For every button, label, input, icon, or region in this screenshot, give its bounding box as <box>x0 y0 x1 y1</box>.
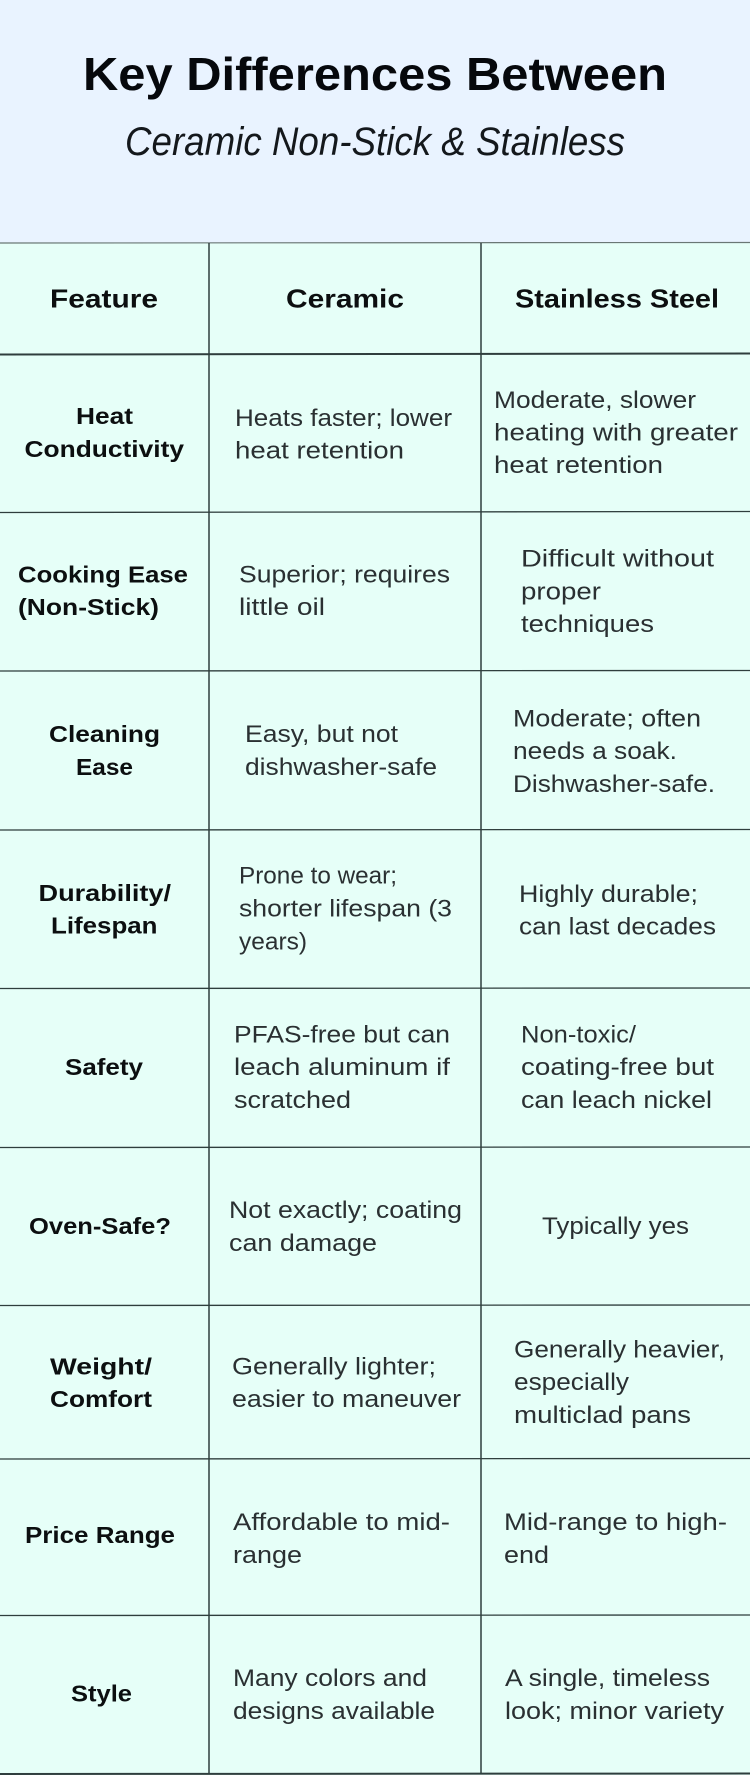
ceramic cell: Affordable to mid- <box>233 1509 450 1536</box>
ceramic cell <box>239 561 450 621</box>
ceramic cell: Many colors and <box>233 1665 427 1692</box>
stainless cell <box>494 387 738 479</box>
ceramic cell <box>233 1509 450 1569</box>
ceramic cell: Prone to wear; <box>239 863 397 890</box>
feature label: Cooking Ease <box>18 561 188 587</box>
stainless cell: needs a soak. <box>513 738 677 765</box>
row: Style <box>71 1665 725 1725</box>
row: Safety <box>65 1021 714 1114</box>
row: Oven-Safe <box>29 1197 689 1257</box>
table header row <box>50 284 719 314</box>
feature label: Comfort <box>50 1386 152 1412</box>
stainless cell: heat retention <box>494 452 663 479</box>
ceramic cell: Easy, but not <box>245 721 398 748</box>
feature label: Durability/ <box>38 880 172 906</box>
ceramic cell: leach aluminum if <box>234 1054 450 1081</box>
ceramic cell <box>235 405 452 464</box>
ceramic cell: Superior; requires <box>239 561 450 588</box>
ceramic cell: scratched <box>234 1087 351 1114</box>
feature label: Ease <box>76 754 133 780</box>
ceramic cell <box>232 1353 461 1413</box>
stainless cell <box>521 546 714 638</box>
ceramic cell: range <box>233 1542 302 1569</box>
feature label: Conductivity <box>24 436 184 462</box>
stainless cell: Highly durable; <box>519 881 698 908</box>
feature label <box>18 561 188 620</box>
row: Heat Conductivity <box>24 387 738 479</box>
stainless cell <box>514 1336 725 1429</box>
ceramic cell <box>234 1021 450 1114</box>
ceramic cell <box>233 1665 435 1725</box>
feature label <box>24 403 184 462</box>
stainless cell <box>513 705 715 798</box>
stainless cell: Typically yes <box>542 1213 689 1240</box>
feature label: Heat <box>76 403 133 429</box>
feature label <box>38 880 172 939</box>
stainless cell: can last decades <box>519 914 716 941</box>
stainless cell: heating with greater <box>494 420 738 446</box>
stainless cell <box>505 1665 725 1725</box>
feature label <box>50 1353 153 1412</box>
feature label: Style <box>71 1680 132 1706</box>
stainless cell: Generally heavier, <box>514 1336 725 1363</box>
feature label: Cleaning <box>49 721 160 747</box>
feature label: Weight/ <box>50 1353 153 1379</box>
stainless cell: Difficult without <box>521 546 714 572</box>
row: Weight/Comfort <box>50 1336 725 1429</box>
stainless cell: Moderate; often <box>513 705 701 732</box>
ceramic cell <box>239 863 452 956</box>
feature label: Lifespan <box>51 913 158 939</box>
stainless cell: look; minor variety <box>505 1698 725 1725</box>
header panel <box>0 0 750 243</box>
stainless cell: especially <box>514 1369 630 1396</box>
row: Cleaning Ease <box>49 705 715 798</box>
stainless cell: Moderate, slower <box>494 387 696 414</box>
ceramic cell: Generally lighter; <box>232 1353 436 1380</box>
ceramic cell <box>229 1197 462 1257</box>
header: Stainless Steel: Stainless Steel <box>515 284 719 314</box>
ceramic cell: heat retention <box>235 438 404 464</box>
stainless cell: Dishwasher-safe. <box>513 771 715 798</box>
feature label <box>49 721 160 780</box>
ceramic cell: little oil <box>239 594 325 621</box>
feature label: (Non-Stick) <box>18 594 159 620</box>
stainless cell <box>521 1021 714 1114</box>
stainless cell: Non-toxic/ <box>521 1021 636 1048</box>
ceramic cell <box>245 721 437 781</box>
feature label: Safety <box>65 1054 143 1080</box>
row: Price Range <box>25 1509 727 1569</box>
stainless cell: multiclad pans <box>514 1402 691 1429</box>
stainless cell: coating-free but <box>521 1054 714 1081</box>
stainless cell: proper <box>521 578 601 605</box>
feature label: Oven-Safe? <box>29 1213 171 1239</box>
ceramic cell: shorter lifespan (3 <box>239 896 452 923</box>
ceramic cell: years) <box>239 928 307 956</box>
stainless cell: end <box>504 1542 549 1569</box>
stainless cell: techniques <box>521 611 654 638</box>
stainless cell: Mid-range to high- <box>504 1509 727 1536</box>
row: Cooking Ease <box>18 546 714 638</box>
header: Ceramic: Ceramic <box>286 284 404 314</box>
ceramic cell: Not exactly; coating <box>229 1197 462 1224</box>
ceramic cell: easier to maneuver <box>232 1386 461 1413</box>
stainless cell <box>519 881 716 941</box>
feature label: Price Range <box>25 1522 175 1548</box>
ceramic cell: designs available <box>233 1698 435 1725</box>
header: Feature: Feature <box>50 284 158 314</box>
stainless cell <box>504 1509 727 1569</box>
row: Durability/Lifespan <box>38 863 716 956</box>
stainless cell: A single, timeless <box>505 1665 710 1692</box>
subtitle: Ceramic Non-Stick & Stainless <box>125 120 625 164</box>
title: Key Differences Between <box>83 48 667 100</box>
ceramic cell: dishwasher-safe <box>245 754 437 781</box>
ceramic cell: Heats faster; lower <box>235 405 452 432</box>
ceramic cell: can damage <box>229 1230 377 1257</box>
stainless cell: can leach nickel <box>521 1087 712 1114</box>
ceramic cell: PFAS-free but can <box>234 1021 450 1048</box>
